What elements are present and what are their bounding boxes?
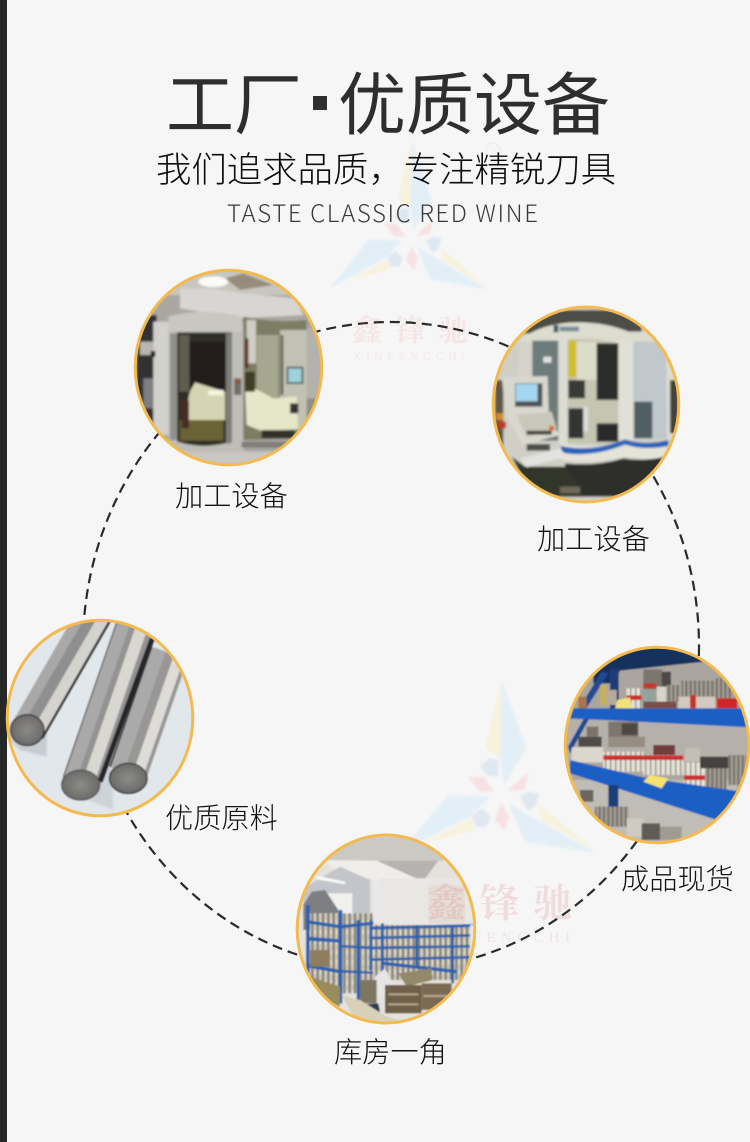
photo: machining equipment right	[494, 308, 678, 500]
label: quality raw material: 优质原料	[165, 796, 278, 837]
english tagline: TASTE CLASSIC RED WINE	[227, 194, 538, 229]
title: 优质设备	[338, 50, 610, 149]
watermark: upper logo: XINFENGCHI	[353, 351, 465, 363]
watermark: upper logo: 鑫锋驰	[352, 306, 481, 350]
watermark: lower logo: XINFENGCHI	[430, 930, 570, 946]
photo frame left	[135, 270, 322, 465]
photo frame right	[493, 307, 679, 502]
watermark: lower logo name over photo: 鑫锋驰	[427, 873, 586, 929]
dashed process ring	[83, 322, 699, 970]
title: 工厂	[166, 50, 302, 149]
label: warehouse corner: 库房一角	[334, 1030, 447, 1071]
photo: steel rods raw material	[8, 622, 192, 814]
photo frame warehouse	[297, 835, 475, 1023]
label: machining equipment right: 加工设备	[537, 517, 650, 558]
subtitle: 我们追求品质，专注精锐刀具	[156, 142, 616, 193]
photo: warehouse corner	[298, 836, 474, 1022]
photo: machining equipment left	[136, 272, 320, 464]
photo: finished goods shelves	[566, 648, 748, 842]
label: machining equipment left: 加工设备	[175, 474, 288, 515]
photo frame rods	[7, 620, 193, 816]
photo frame shelves	[565, 647, 749, 843]
watermark: lower logo	[400, 680, 600, 946]
title	[166, 50, 610, 149]
left dark edge bar	[0, 0, 7, 1142]
label: finished goods in stock: 成品现货	[621, 857, 734, 898]
watermark: upper logo	[330, 140, 500, 363]
